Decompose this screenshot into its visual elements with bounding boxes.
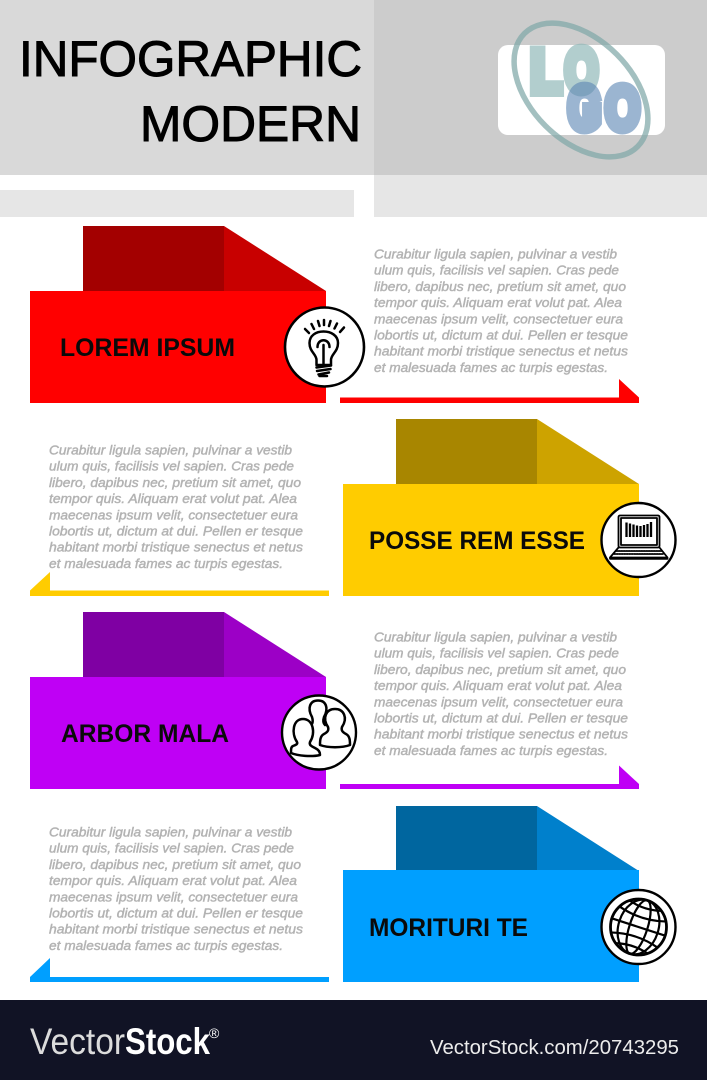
- banner: [343, 870, 639, 982]
- folded tab: [396, 806, 639, 871]
- banner: [30, 677, 326, 789]
- icon: globe: [602, 890, 676, 964]
- logo: L: [531, 38, 561, 105]
- text block: lorem ipsum: libero, dapibus nec, pretium sit amet, quo: [374, 279, 626, 294]
- title: INFOGRAPHIC: [19, 31, 362, 87]
- text block: morituri te: libero, dapibus nec, pretium sit amet, quo: [49, 857, 301, 872]
- heading: ARBOR MALA: [61, 720, 229, 748]
- footer logo: ®: [209, 1025, 220, 1041]
- text block: arbor mala: habitant morbi tristique senectus et netus: [374, 727, 629, 742]
- text block: arbor mala: libero, dapibus nec, pretium sit amet, quo: [374, 662, 626, 677]
- text block: arbor mala: [374, 630, 629, 758]
- footer logo: Vector: [30, 1021, 125, 1062]
- icon: light bulb: [285, 308, 364, 386]
- text block: posse rem esse: tempor quis. Aliquam erat volut pat. Alea: [49, 491, 297, 506]
- banner: [30, 291, 326, 403]
- text block: lorem ipsum: ulum quis, facilisis vel sapien. Cras pede: [374, 263, 619, 278]
- arrow bar: yellow: [30, 572, 329, 596]
- text block: morituri te: tempor quis. Aliquam erat volut pat. Alea: [49, 873, 297, 888]
- text block: lorem ipsum: tempor quis. Aliquam erat volut pat. Alea: [374, 295, 622, 310]
- text block: arbor mala: Curabitur ligula sapien, pulvinar a vestib: [374, 630, 617, 644]
- logo: [489, 0, 673, 182]
- text block: posse rem esse: lobortis ut, dictum at dui. Pellen er tesque: [49, 524, 303, 538]
- text block: arbor mala: et malesuada fames ac turpis egestas.: [374, 743, 608, 758]
- header background: [0, 0, 707, 217]
- footer: [0, 1000, 707, 1080]
- panel: lorem ipsum: [30, 226, 364, 403]
- banner: [343, 484, 639, 596]
- heading: LOREM IPSUM: [60, 334, 235, 362]
- text block: lorem ipsum: lobortis ut, dictum at dui. Pellen er tesque: [374, 328, 628, 342]
- heading: POSSE REM ESSE: [369, 527, 585, 555]
- text block: morituri te: ulum quis, facilisis vel sapien. Cras pede: [49, 841, 294, 856]
- text block: lorem ipsum: habitant morbi tristique senectus et netus: [374, 344, 629, 359]
- text block: lorem ipsum: et malesuada fames ac turpis egestas.: [374, 360, 608, 375]
- text block: morituri te: lobortis ut, dictum at dui. Pellen er tesque: [49, 906, 303, 920]
- text block: posse rem esse: ulum quis, facilisis vel sapien. Cras pede: [49, 459, 294, 474]
- text block: lorem ipsum: [374, 246, 629, 375]
- panel: morituri te: [343, 806, 676, 982]
- text block: arbor mala: lobortis ut, dictum at dui. Pellen er tesque: [374, 710, 628, 726]
- text block: posse rem esse: et malesuada fames ac turpis egestas.: [49, 556, 283, 571]
- logo: G: [568, 76, 601, 143]
- panel: arbor mala: [30, 612, 356, 789]
- text block: posse rem esse: libero, dapibus nec, pretium sit amet, quo: [49, 475, 301, 490]
- icon: laptop: [602, 503, 676, 577]
- text block: arbor mala: tempor quis. Aliquam erat volut pat. Alea: [374, 678, 622, 693]
- panel: posse rem esse: [343, 419, 676, 596]
- text block: posse rem esse: maecenas ipsum velit, consectetuer eura: [49, 507, 298, 522]
- text block: morituri te: Curabitur ligula sapien, pulvinar a vestib: [49, 824, 292, 840]
- text block: posse rem esse: habitant morbi tristique senectus et netus: [49, 540, 304, 555]
- footer logo: [30, 1021, 220, 1062]
- folded tab: [83, 612, 326, 677]
- icon: people: [282, 696, 356, 770]
- text block: arbor mala: maecenas ipsum velit, consectetuer eura: [374, 694, 623, 709]
- text block: morituri te: maecenas ipsum velit, consectetuer eura: [49, 889, 298, 904]
- title: [19, 31, 362, 152]
- text block: posse rem esse: Curabitur ligula sapien, pulvinar a vestib: [49, 442, 292, 458]
- text block: posse rem esse: [49, 442, 304, 571]
- title: MODERN: [140, 96, 361, 152]
- logo: O: [565, 38, 598, 105]
- text block: morituri te: et malesuada fames ac turpis egestas.: [49, 938, 283, 953]
- text block: lorem ipsum: Curabitur ligula sapien, pulvinar a vestib: [374, 246, 617, 262]
- folded tab: [396, 419, 639, 484]
- arrow bar: red: [340, 379, 639, 403]
- text block: lorem ipsum: maecenas ipsum velit, consectetuer eura: [374, 311, 623, 326]
- logo: O: [605, 76, 640, 143]
- arrow bar: purple: [340, 766, 639, 789]
- arrow bar: blue: [30, 958, 329, 982]
- text block: morituri te: [49, 824, 304, 953]
- text block: morituri te: habitant morbi tristique senectus et netus: [49, 922, 304, 937]
- footer id: VectorStock.com/20743295: [430, 1037, 679, 1059]
- heading: MORITURI TE: [369, 914, 528, 942]
- folded tab: [83, 226, 326, 291]
- text block: arbor mala: ulum quis, facilisis vel sapien. Cras pede: [374, 646, 619, 661]
- footer logo: Stock: [125, 1021, 210, 1062]
